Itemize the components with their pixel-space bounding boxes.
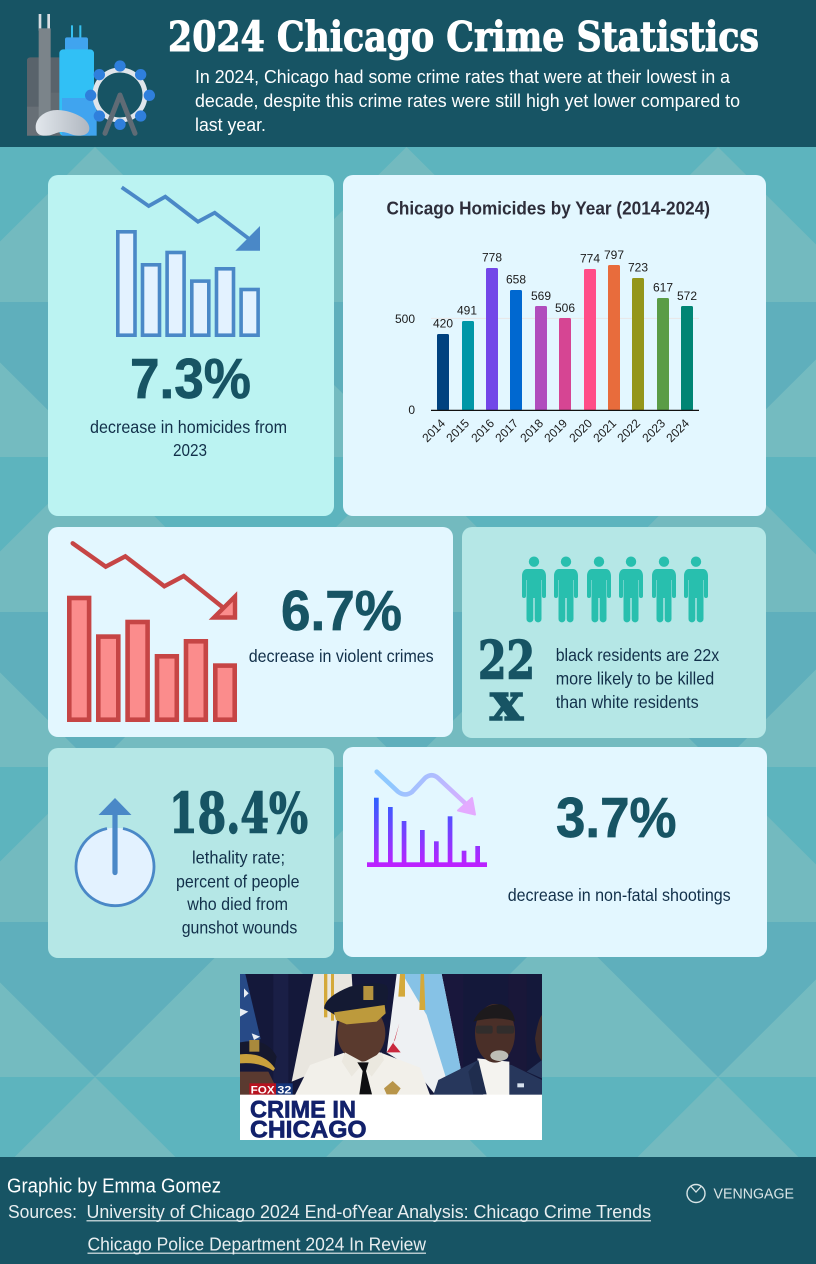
caption: 22x: than white residents	[556, 692, 699, 712]
bar chart: 420	[433, 316, 453, 330]
caption: lethality: lethality rate;	[192, 848, 285, 868]
footer band	[0, 1157, 816, 1264]
credit: Graphic by Emma Gomez	[7, 1174, 221, 1198]
news photo: Crime in Chicago press conference	[240, 974, 542, 1143]
caption: homicides: 2023	[173, 440, 207, 460]
news logo: FOX 32	[249, 1083, 293, 1097]
bar chart: 658	[506, 272, 526, 286]
header band	[0, 0, 816, 147]
caption: non-fatal shootings: decrease in non-fatal shootings	[508, 885, 731, 905]
icon: gradient declining chart	[367, 772, 487, 867]
caption: lethality: gunshot wounds	[182, 918, 298, 938]
sources: Chicago Police Department 2024 In Review	[88, 1234, 427, 1254]
caption: homicides: decrease in homicides from	[90, 417, 287, 437]
caption: lethality: percent of people	[176, 872, 300, 892]
statistic: 22x: 22	[478, 630, 535, 692]
news caption: CRIME IN	[250, 1096, 356, 1123]
intro text: last year.	[195, 114, 266, 135]
intro text: decade, despite this crime rates were still high yet lower compared to	[195, 90, 740, 111]
panel: homicides by year chart	[343, 175, 766, 516]
caption: homicides	[90, 417, 287, 460]
bar chart: 572	[677, 289, 697, 303]
statistic: 22x: x	[490, 672, 524, 733]
bar chart: 774	[580, 252, 600, 266]
bar chart: 2018	[517, 416, 546, 445]
logo: Venngage	[687, 1184, 794, 1203]
bar chart: 2021	[590, 416, 619, 445]
logo: Venngage: VENNGAGE	[714, 1186, 794, 1203]
caption: violent crimes: decrease in violent crimes	[249, 646, 434, 666]
panel: homicides decrease	[48, 175, 334, 516]
bar chart: 2023	[639, 416, 668, 445]
news caption	[250, 1100, 366, 1138]
news logo: FOX 32: FOX	[251, 1085, 275, 1097]
panel: non-fatal shootings	[343, 747, 767, 957]
panel: lethality rate	[48, 748, 334, 958]
caption: 22x: more likely to be killed	[556, 668, 714, 688]
bar chart: 2017	[492, 416, 521, 445]
statistic: 22x	[478, 630, 535, 733]
sources: University of Chicago 2024 End-ofYear Analysis: Chicago Crime Trends	[86, 1201, 651, 1222]
bar chart: 0	[408, 403, 415, 417]
icon: Chicago skyline	[27, 14, 155, 136]
icon: gauge with up arrow	[76, 798, 154, 906]
bar chart: 797	[604, 248, 624, 262]
bar chart: 500	[395, 312, 415, 326]
statistic: 18.4%: 18.4%	[169, 780, 308, 846]
panel: 22x racial disparity	[462, 527, 766, 738]
icon: blue declining bar chart	[118, 187, 260, 335]
bar chart: 2014	[419, 416, 448, 445]
sources: Sources:	[8, 1201, 77, 1222]
news logo: FOX 32: 32	[277, 1085, 291, 1097]
news caption: CHICAGO	[250, 1116, 367, 1143]
bar chart: 569	[531, 289, 551, 303]
bar chart	[395, 248, 699, 445]
statistic: 7.3%: 7.3%	[130, 347, 251, 411]
intro text	[195, 66, 740, 135]
bar chart: 506	[555, 301, 575, 315]
panel: violent crimes decrease	[48, 527, 453, 737]
bar chart: 2015	[443, 416, 472, 445]
chart title: Chicago Homicides by Year (2014-2024)	[386, 198, 710, 218]
icon: six people	[522, 556, 708, 622]
caption: lethality: who died from	[186, 894, 288, 914]
bar chart: 2019	[541, 416, 570, 445]
bar chart: 723	[628, 260, 648, 274]
icon: red declining bar chart	[69, 543, 235, 720]
statistic: 6.7%: 6.7%	[281, 579, 402, 643]
caption: lethality	[176, 848, 300, 938]
caption: 22x: black residents are 22x	[556, 645, 719, 665]
caption: 22x	[556, 645, 719, 712]
intro text: In 2024, Chicago had some crime rates that were at their lowest in a	[195, 66, 731, 87]
sources	[8, 1201, 651, 1254]
bar chart: 2024	[663, 416, 692, 445]
statistic: 3.7%: 3.7%	[556, 786, 676, 850]
bar chart: 491	[457, 304, 477, 318]
background pattern	[0, 147, 816, 1158]
bar chart: 617	[653, 280, 673, 294]
bar chart: 778	[482, 250, 502, 264]
bar chart: 2016	[468, 416, 497, 445]
bar chart: 2020	[566, 416, 595, 445]
bar chart: 2022	[614, 416, 643, 445]
